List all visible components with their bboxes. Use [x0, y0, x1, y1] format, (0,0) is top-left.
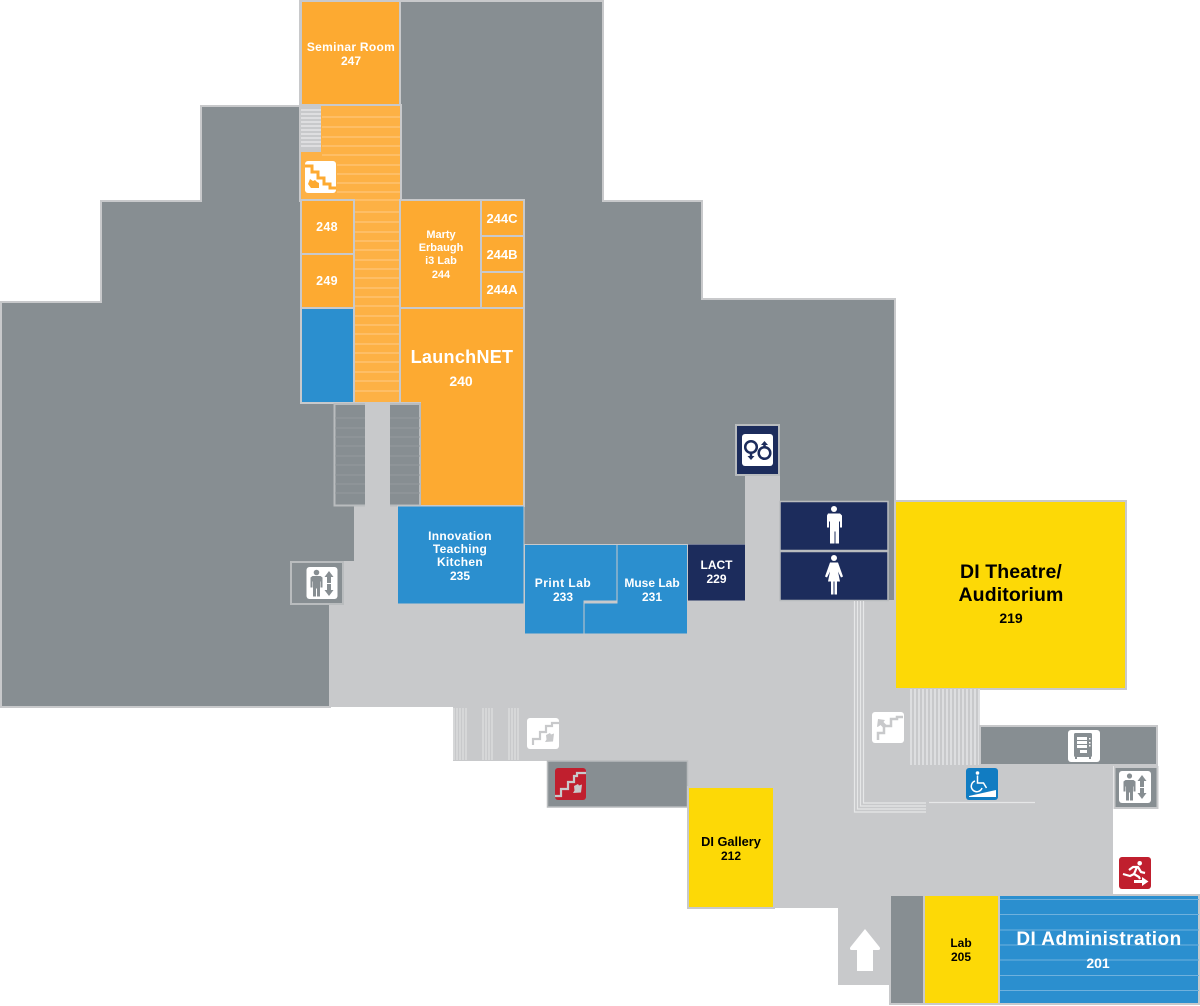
- room: DI Gallery 212: 212: [721, 849, 741, 863]
- room: DI Theatre/Auditorium 219: 219: [999, 610, 1023, 626]
- stair corridor orange: [300, 105, 401, 403]
- room: 249: 249: [316, 274, 338, 288]
- icon: elevator: [1119, 771, 1151, 803]
- women's restroom: [780, 552, 888, 600]
- room: LACT 229: LACT: [700, 558, 733, 572]
- room: LACT 229: 229: [706, 572, 727, 586]
- room: 249: [301, 254, 354, 308]
- room: LaunchNET 240: 240: [449, 373, 473, 389]
- room: Seminar Room 247: 247: [341, 54, 361, 68]
- room: DI Administration 201: [999, 895, 1199, 1004]
- elevator west: [291, 562, 343, 604]
- icon: stairs up: [872, 712, 904, 743]
- icon: elevator: [306, 567, 338, 599]
- room: Lab 205: 205: [951, 950, 971, 964]
- room: Muse Lab 231: 231: [642, 590, 662, 604]
- icon: stairs orange: [305, 161, 336, 193]
- stair stripes: theatre: [854, 601, 1035, 812]
- room: Marty Erbaugh i3 Lab 244: Erbaugh: [419, 242, 464, 254]
- room: 248: 248: [316, 220, 338, 234]
- room: 244A: [481, 272, 524, 308]
- room: Innovation Teaching Kitchen 235: [398, 506, 524, 604]
- room: 244C: 244C: [486, 211, 518, 226]
- elevator east: [1114, 767, 1158, 808]
- room: Print Lab 233: Print Lab: [535, 576, 591, 590]
- restroom sign unisex: [736, 425, 779, 475]
- icon: stairs down red: [555, 768, 586, 800]
- room: Marty Erbaugh i3 Lab 244: i3 Lab: [425, 255, 457, 267]
- stair block grey: [548, 761, 688, 807]
- icon: man: [827, 506, 842, 544]
- room: Muse Lab 231: [584, 544, 688, 634]
- grey block south: [890, 895, 924, 1004]
- corridor floor: [290, 403, 1113, 985]
- room: blue unnamed: [301, 308, 354, 403]
- room: Marty Erbaugh i3 Lab 244: [400, 200, 481, 308]
- room: Lab 205: Lab: [950, 936, 972, 950]
- room: 244B: [481, 236, 524, 272]
- stairs grey right: [390, 404, 420, 506]
- room: DI Theatre/Auditorium 219: [895, 501, 1126, 689]
- room: DI Gallery 212: [688, 787, 774, 908]
- room: 244B: 244B: [486, 247, 518, 262]
- room: DI Gallery 212: DI Gallery: [701, 834, 762, 849]
- room: Innovation Teaching Kitchen 235: Kitchen: [437, 555, 483, 569]
- icon: woman: [825, 555, 843, 594]
- grey unavailable areas: [1, 1, 895, 707]
- room: Innovation Teaching Kitchen 235: Innovation: [428, 529, 492, 543]
- room: 244A: 244A: [486, 282, 518, 297]
- room: Muse Lab 231: Muse Lab: [624, 576, 680, 590]
- room: 248: [301, 200, 354, 254]
- icon: wheelchair ramp: [966, 768, 998, 800]
- icon: entrance arrow: [850, 929, 880, 971]
- stairs grey left: [334, 404, 365, 506]
- room: Innovation Teaching Kitchen 235: 235: [450, 569, 470, 583]
- room: Seminar Room 247: [301, 1, 400, 105]
- icon: gender symbols: [742, 434, 773, 466]
- room: Print Lab 233: 233: [553, 590, 573, 604]
- room: Marty Erbaugh i3 Lab 244: 244: [432, 269, 451, 281]
- room: 244C: [481, 200, 524, 236]
- room: DI Theatre/Auditorium 219: Auditorium: [959, 584, 1063, 606]
- room: Lab 205: [924, 895, 999, 1004]
- room: Seminar Room 247: Seminar Room: [307, 40, 395, 54]
- vending area: [980, 726, 1157, 765]
- room: DI Theatre/Auditorium 219: DI Theatre/: [960, 561, 1062, 583]
- room: LaunchNET 240: LaunchNET: [411, 347, 513, 367]
- room: LaunchNET 240: [400, 308, 524, 506]
- icon: stairs down white: [527, 718, 559, 749]
- room: Innovation Teaching Kitchen 235: Teaching: [433, 542, 487, 556]
- stair stripes: lower central: [454, 708, 518, 760]
- grey stairs at top: [301, 106, 321, 152]
- room: Marty Erbaugh i3 Lab 244: Marty: [426, 229, 457, 241]
- men's restroom: [780, 502, 888, 550]
- room: DI Administration 201: 201: [1086, 955, 1110, 971]
- icon: vending machine: [1068, 730, 1100, 762]
- room: DI Administration 201: DI Administration: [1016, 929, 1182, 950]
- room: LACT 229: [688, 544, 745, 600]
- room: Print Lab 233: [524, 544, 617, 634]
- icon: emergency exit: [1119, 857, 1151, 889]
